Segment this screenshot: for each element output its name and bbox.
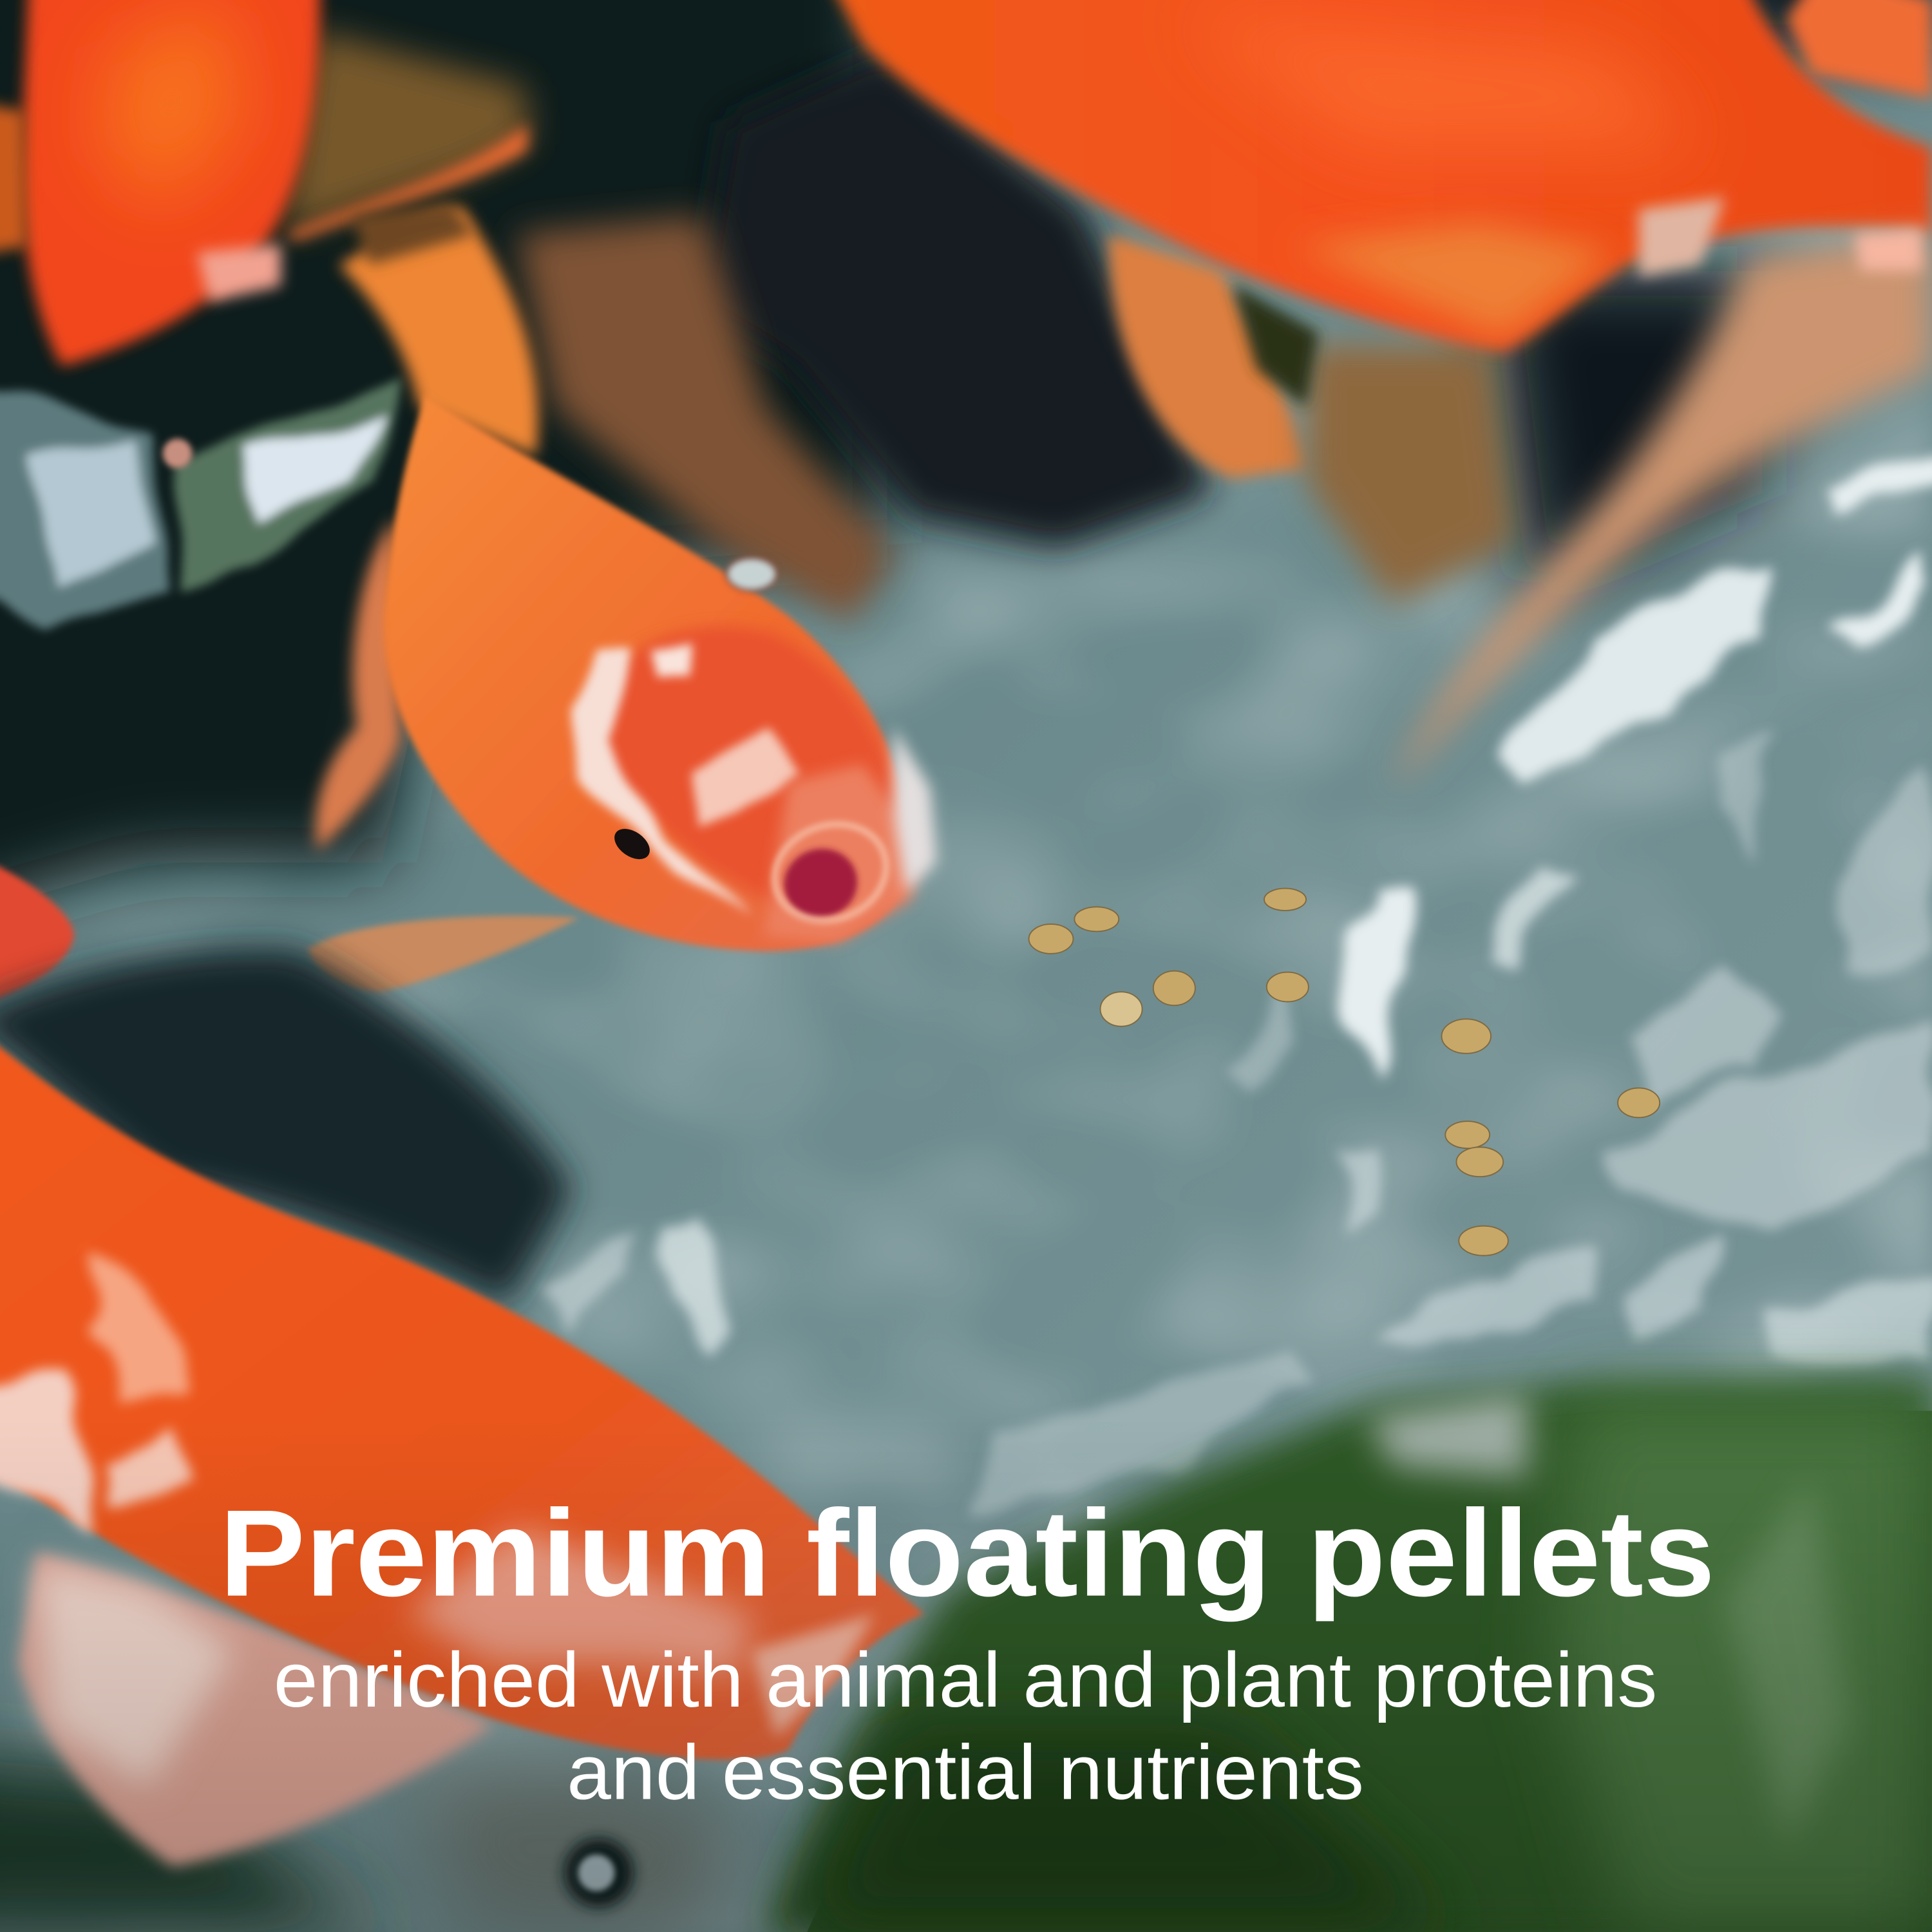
fish mouth (774, 838, 867, 929)
left edge red fish (0, 850, 74, 1010)
subheading line one: enriched with animal and plant proteins (274, 1636, 1657, 1723)
green pond bottom right (764, 1380, 1932, 1932)
air bubble (727, 558, 776, 590)
small bubble top left (163, 439, 192, 468)
bottom shade behind caption (0, 1417, 1932, 1932)
subheading line two: and essential nutrients (567, 1728, 1364, 1815)
brown shadow fish under centre fish (518, 216, 893, 622)
dark rock (696, 50, 1214, 548)
dark fish lower left (0, 948, 573, 1306)
fish: centre with open mouth (308, 204, 936, 992)
water highlights (542, 450, 1932, 1515)
headline: Premium floating pellets (220, 1484, 1715, 1622)
fish: top right (801, 0, 1932, 788)
caption (220, 1484, 1715, 1815)
water reflection top left (0, 376, 406, 629)
floating pellets (1029, 888, 1660, 1256)
fish eye (609, 822, 656, 866)
fish: bottom left (0, 1016, 924, 1932)
fish: top left (0, 0, 530, 366)
